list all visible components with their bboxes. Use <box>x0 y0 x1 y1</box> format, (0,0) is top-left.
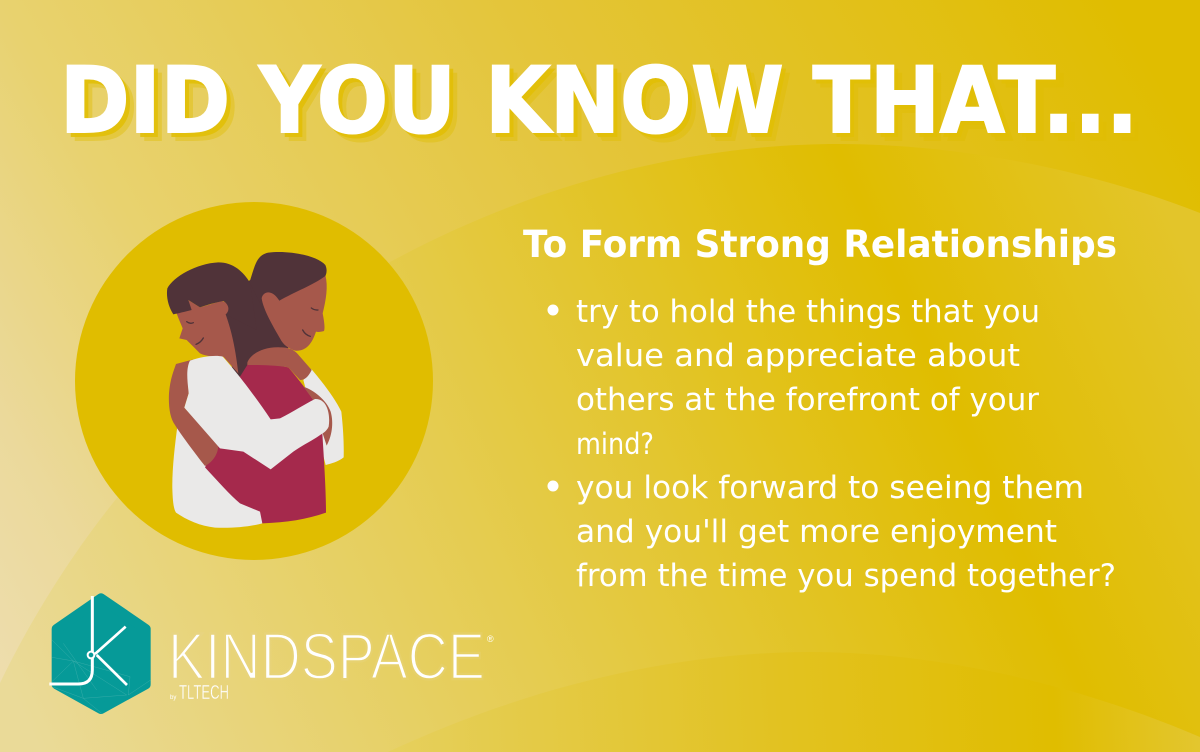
right person hand on shoulder <box>247 347 312 380</box>
background wave: bottom arc <box>388 652 1200 752</box>
bullet 1: try to hold the things that you <box>576 294 1040 330</box>
left person face <box>177 300 238 373</box>
closed eyes and smiles <box>187 308 318 344</box>
right person red torso <box>205 362 326 523</box>
bullet list <box>548 294 1116 594</box>
left person white sleeve <box>184 356 329 469</box>
left person torso <box>172 427 263 528</box>
bullet 1: mind? <box>576 427 654 461</box>
title: DID YOU KNOW THAT... <box>60 49 1138 154</box>
logo: Kindspace <box>49 596 494 713</box>
bullet 2: and you'll get more enjoyment <box>576 514 1057 550</box>
bullet 1: value and appreciate about <box>576 338 1020 374</box>
left person long hair <box>220 280 288 377</box>
bullet 2: you look forward to seeing them <box>576 470 1084 506</box>
logo hexagon icon <box>49 596 151 713</box>
byline brand: TLTECH <box>179 682 229 704</box>
bullet 2 <box>548 470 1116 594</box>
bullet 2: from the time you spend together? <box>576 558 1116 594</box>
bullet 1 <box>548 294 1040 461</box>
left person arm skin <box>169 359 218 466</box>
circle backdrop <box>75 202 433 560</box>
byline: by <box>170 695 176 701</box>
bullet 1: others at the forefront of your <box>576 382 1039 418</box>
right person face and neck <box>262 275 327 351</box>
subheading: To Form Strong Relationships <box>523 223 1117 266</box>
logo wordmark: KINDSPACE <box>168 619 485 693</box>
right person back sleeve <box>303 369 344 465</box>
registered mark: ® <box>487 634 494 644</box>
illustration: two people hugging in a circle <box>75 202 433 560</box>
figures <box>167 252 344 528</box>
right person forearm skin <box>303 387 332 446</box>
right person hair <box>250 252 327 308</box>
left person hair <box>167 262 257 330</box>
